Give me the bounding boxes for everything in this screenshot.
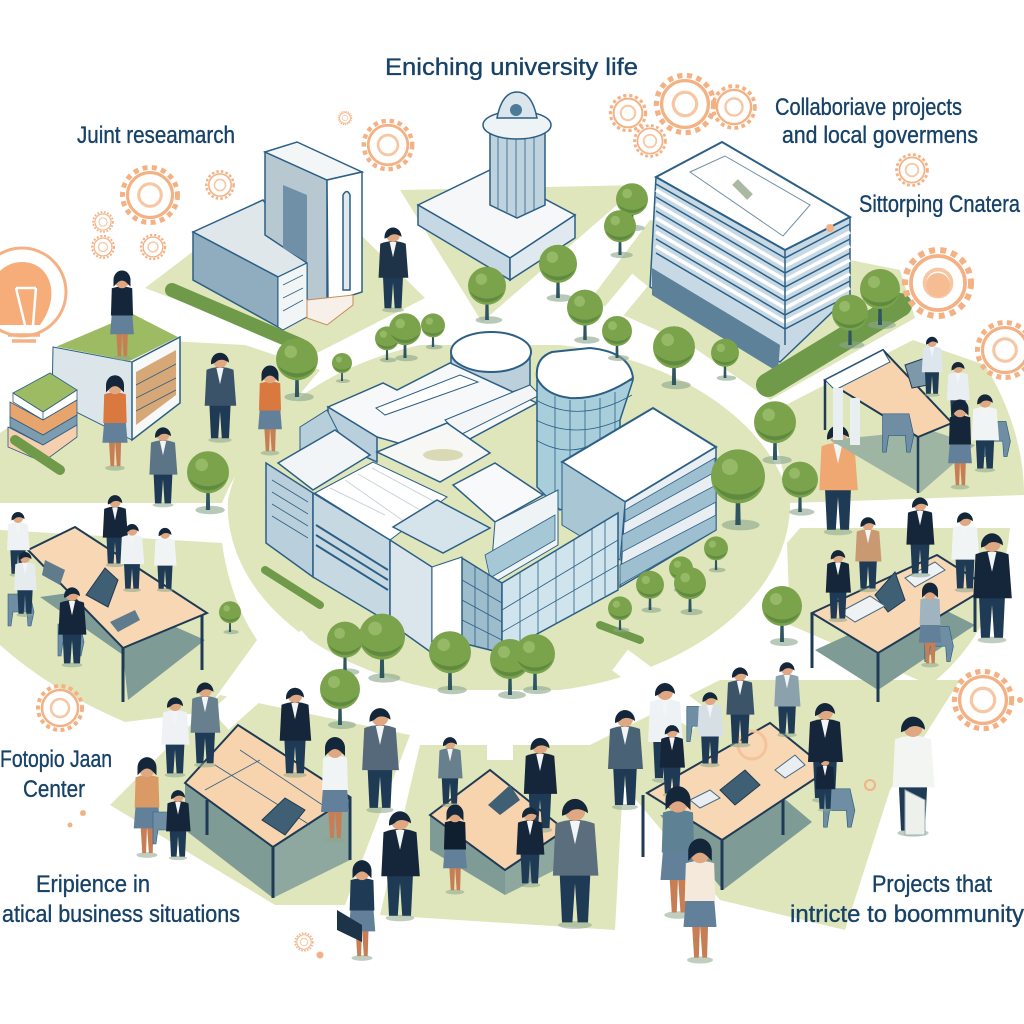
table top xyxy=(812,555,988,653)
label: collaborative projects: Collaboriave projects xyxy=(775,94,962,121)
green campus ground wedges xyxy=(0,185,1024,930)
wing face xyxy=(193,232,278,327)
left annex xyxy=(300,410,345,450)
panel: bottom-left meeting table xyxy=(134,683,420,961)
label: practical business situations: atical business situations xyxy=(2,901,240,928)
label: fotopio japan: Fotopio Jaan xyxy=(0,746,112,773)
panel: top-right meeting table xyxy=(825,337,1010,493)
label: contribute to community: intricte to boommunity xyxy=(790,901,1024,928)
panel: right meeting table xyxy=(812,497,1012,702)
panel: bottom-right meeting table xyxy=(608,662,935,964)
icon: lightbulb xyxy=(0,248,66,341)
right block roof xyxy=(562,408,716,502)
table shadow xyxy=(40,590,205,700)
panel: left meeting table xyxy=(7,495,207,702)
shelf front xyxy=(132,337,180,440)
wing roof xyxy=(193,200,307,277)
panel: domed building xyxy=(418,92,575,280)
title: enriching university life: Eniching university life xyxy=(385,54,638,81)
skylight xyxy=(393,500,490,553)
people xyxy=(103,495,128,567)
white radial roads xyxy=(220,280,700,760)
tower grey face xyxy=(265,152,327,303)
panel: book building and lightbulb corner xyxy=(0,248,180,462)
panel: stacked office building xyxy=(650,142,850,372)
right block wall xyxy=(620,447,716,587)
tower roof xyxy=(265,142,362,180)
centre wall xyxy=(313,493,390,623)
panel: central campus building xyxy=(266,332,716,653)
ribbed roof xyxy=(315,462,447,540)
book stack xyxy=(8,373,77,462)
people around buildings xyxy=(102,228,858,535)
green roof xyxy=(53,313,180,362)
table top xyxy=(28,527,207,648)
table top xyxy=(647,723,828,840)
base xyxy=(307,295,353,325)
panel: joint research building xyxy=(193,142,362,330)
label: projects that: Projects that xyxy=(872,871,992,898)
pale wall xyxy=(390,540,432,653)
campus trees xyxy=(187,183,900,729)
panel: bottom-centre meeting table xyxy=(430,737,598,929)
tower white face xyxy=(327,172,362,303)
side wall xyxy=(52,347,132,440)
left wall xyxy=(266,463,313,577)
table shadow xyxy=(660,795,812,890)
hedges xyxy=(15,290,900,640)
glass round tower xyxy=(536,348,633,510)
upper left roof xyxy=(328,363,537,455)
label: joint research: Juint reseamarch xyxy=(77,122,235,149)
people xyxy=(608,710,643,810)
label: experience in: Eripience in xyxy=(36,871,150,898)
round tower back xyxy=(451,332,531,395)
label: center: Center xyxy=(23,776,85,803)
table top xyxy=(825,350,952,437)
label: and local governments: and local govermens xyxy=(782,122,978,149)
table shadow xyxy=(830,430,975,493)
glass corner xyxy=(462,558,502,653)
middle roofs xyxy=(377,423,490,482)
table shadow xyxy=(815,600,975,690)
people xyxy=(855,517,882,592)
